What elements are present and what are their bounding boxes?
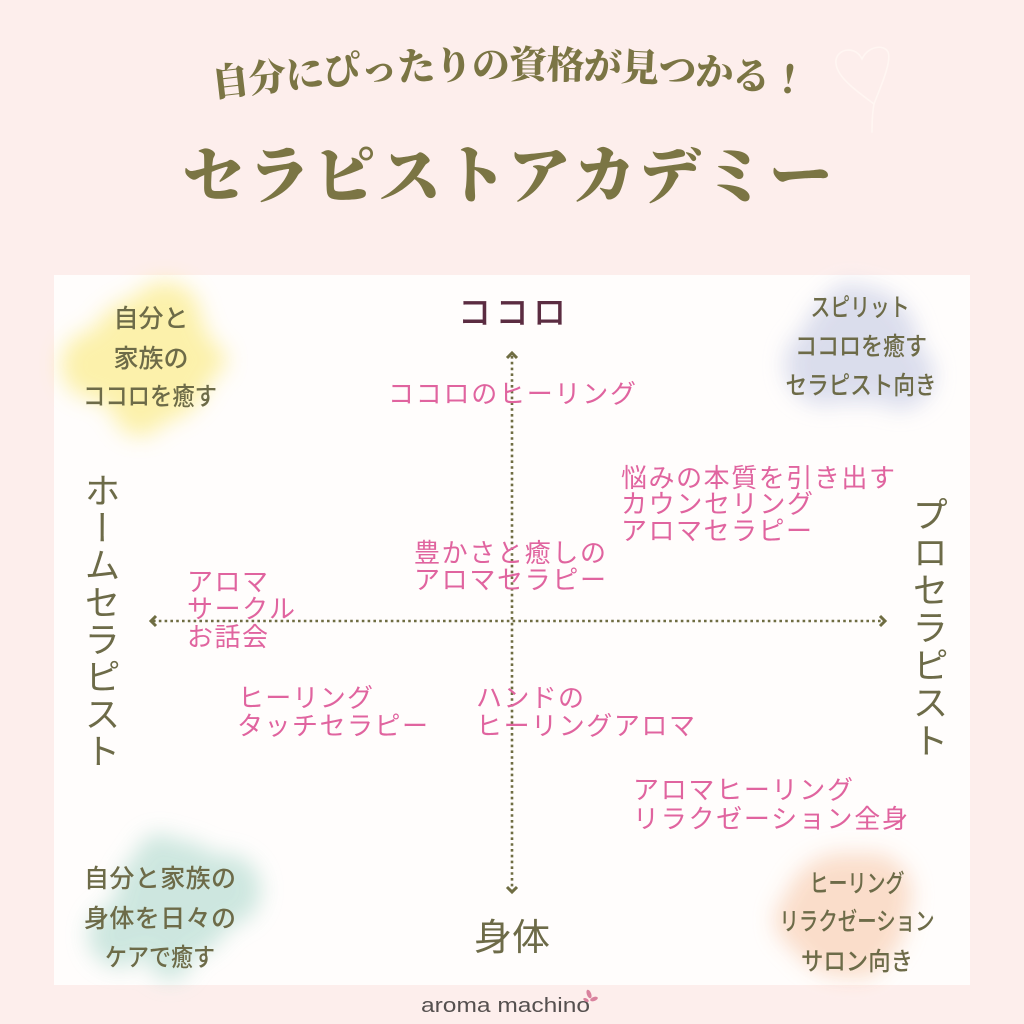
map item: aroma circle: サークル — [187, 594, 295, 624]
map item: aroma circle: アロマ — [187, 567, 268, 597]
map item: full body relaxation: アロマヒーリング — [633, 775, 853, 805]
corner note: top left — [83, 305, 217, 411]
corner note: top right: スピリット — [810, 294, 910, 322]
map item: hand aroma: ハンドの — [476, 683, 584, 713]
map item: touch therapy: ヒーリング — [238, 683, 373, 713]
map item: hand aroma: ヒーリングアロマ — [476, 711, 695, 741]
map item: counselling aromatherapy: アロマセラピー — [621, 516, 812, 546]
map item: heart healing: ココロのヒーリング — [388, 379, 636, 409]
panel background — [54, 275, 970, 985]
map item: aroma circle — [187, 567, 295, 652]
icon: logo leaves — [583, 989, 598, 1003]
map item: aroma circle: お話会 — [187, 622, 268, 652]
corner note: top right: ココロを癒す — [795, 333, 927, 361]
icon: heart outline — [836, 47, 889, 132]
corner note: top right — [786, 294, 936, 400]
axis label: right: プロセラピスト — [908, 496, 948, 759]
map item: full body relaxation — [633, 775, 908, 834]
blob: yellow watercolor — [61, 282, 226, 436]
vertical axis arrow — [507, 353, 517, 892]
map item: hand aroma — [476, 683, 695, 741]
corner note: top left: ココロを癒す — [83, 383, 217, 411]
blob: peach watercolor — [775, 853, 912, 978]
panel: positioning map — [54, 275, 970, 985]
map item: counselling aromatherapy: カウンセリング — [621, 489, 813, 519]
map item: touch therapy: タッチセラピー — [237, 711, 428, 741]
corner note: bottom right — [780, 870, 934, 976]
corner note: top right: セラピスト向き — [786, 372, 936, 400]
horizontal axis arrow — [151, 616, 885, 626]
corner note: bottom left: 自分と家族の — [84, 865, 236, 893]
axis label: left: ホームセラピスト — [80, 472, 120, 770]
axis label: top: ココロ — [458, 294, 566, 331]
axis label: bottom: 身体 — [474, 917, 550, 958]
subtitle: curved heading: 自分にぴったりの資格が見つかる！ — [216, 45, 794, 100]
map item: rich aromatherapy — [414, 538, 606, 595]
corner note: bottom left: 身体を日々の — [84, 905, 236, 933]
corner note: bottom right: ヒーリング — [810, 870, 904, 898]
logo: aroma machino: aroma machino — [421, 995, 590, 1017]
map item: counselling aromatherapy: 悩みの本質を引き出す — [621, 463, 895, 493]
corner note: bottom right: サロン向き — [801, 948, 913, 976]
blob: lavender watercolor — [785, 284, 934, 409]
map item: rich aromatherapy: アロマセラピー — [414, 565, 606, 595]
map item: full body relaxation: リラクゼーション全身 — [633, 804, 908, 834]
map item: counselling aromatherapy — [621, 463, 895, 546]
title: セラピストアカデミー — [182, 142, 832, 212]
corner note: bottom left — [84, 865, 236, 972]
map item: touch therapy — [237, 683, 428, 741]
corner note: top left: 自分と — [113, 305, 189, 333]
blob: green watercolor — [88, 834, 261, 980]
corner note: bottom left: ケアで癒す — [105, 944, 215, 972]
corner note: bottom right: リラクゼーション — [780, 908, 934, 936]
logo: aroma machino — [421, 989, 598, 1017]
map item: rich aromatherapy: 豊かさと癒しの — [414, 538, 606, 568]
corner note: top left: 家族の — [113, 345, 189, 373]
